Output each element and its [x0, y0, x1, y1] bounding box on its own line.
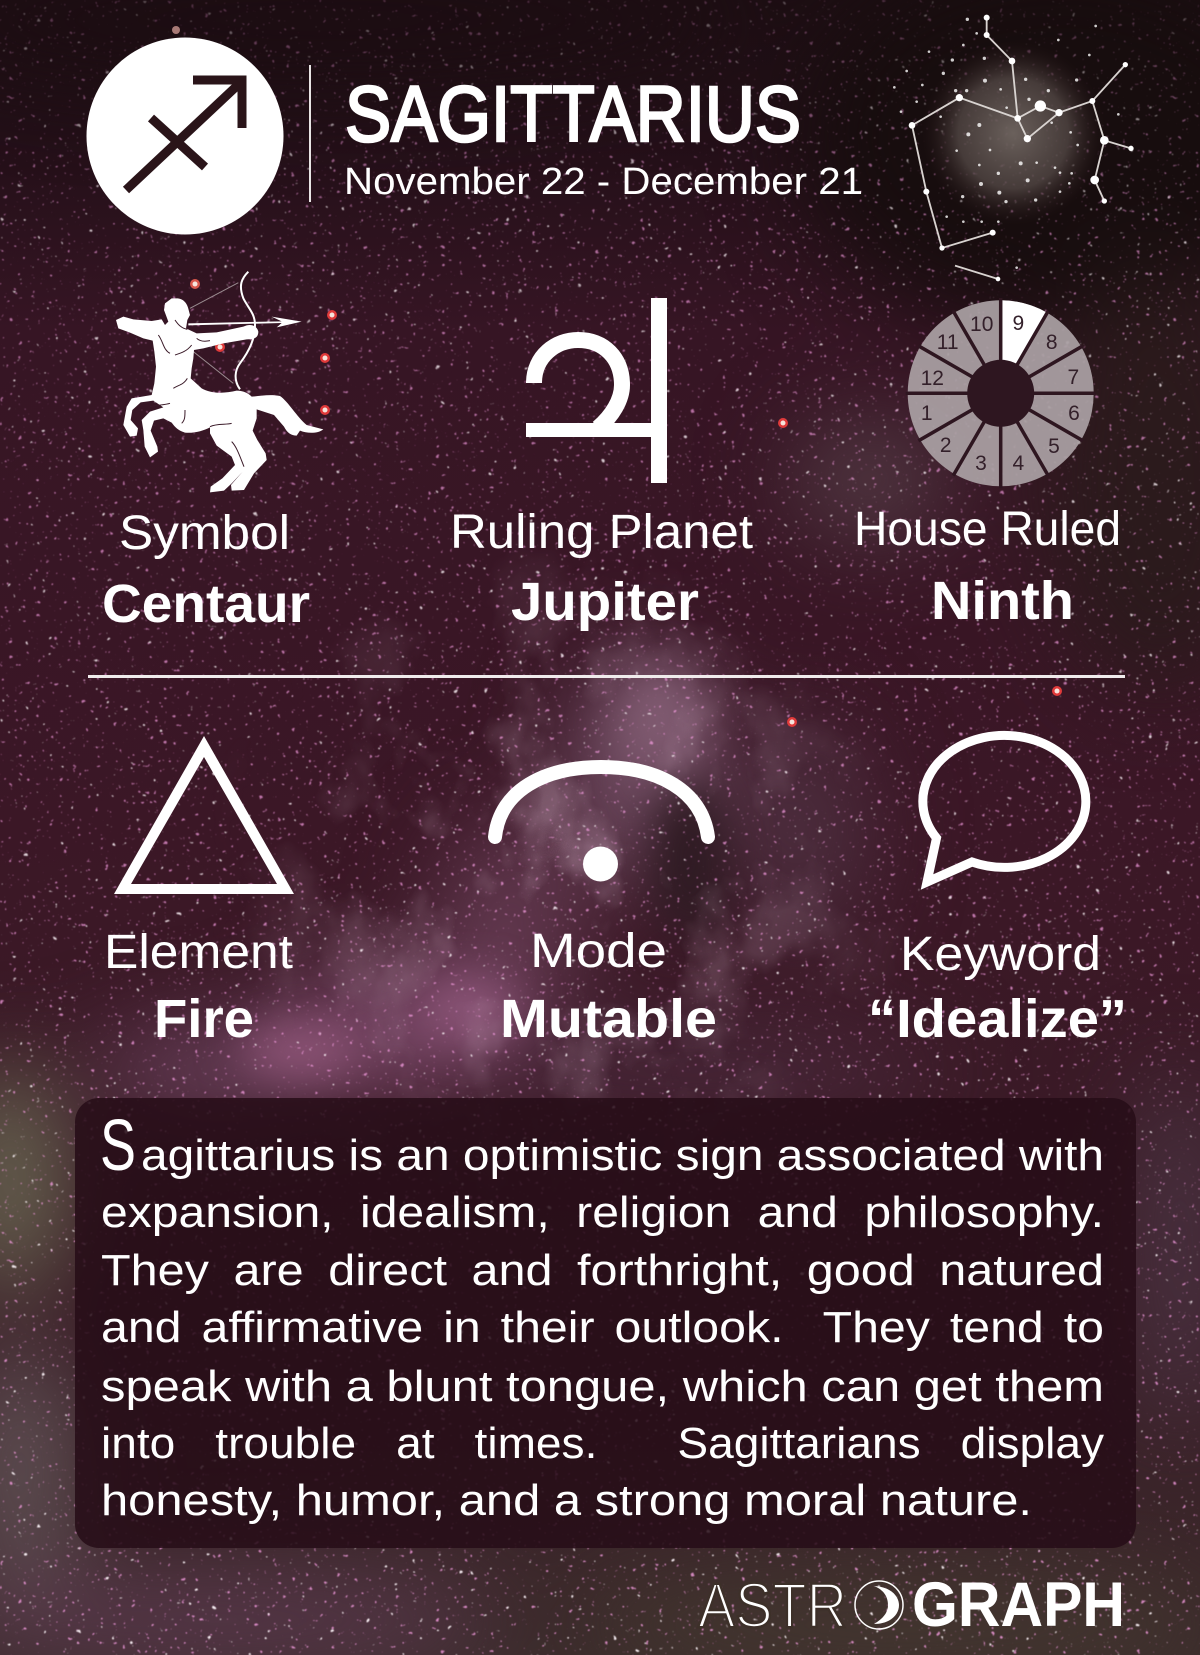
logo: Astrograph [698, 1570, 1125, 1641]
icon: house wheel with ninth house highlighted [906, 298, 1096, 488]
header circle with Sagittarius glyph [86, 38, 284, 234]
label: Symbol Centaur: Symbol [119, 507, 290, 560]
label: Element Fire: Fire [154, 989, 254, 1049]
label: Element Fire [104, 926, 293, 1049]
icon: house wheel with ninth house highlighted: 1 [921, 402, 933, 425]
date range: November 22 - December 21 [344, 161, 863, 203]
label: Ruling Planet Jupiter: Jupiter [511, 572, 699, 632]
title [344, 69, 863, 203]
label: Symbol Centaur [102, 507, 310, 634]
description text: into trouble at times. Sagittarians display [101, 1419, 1104, 1468]
label: Element Fire: Element [104, 926, 293, 979]
icon: speech bubble [923, 735, 1086, 882]
logo: Astrograph: GRAPH [912, 1570, 1125, 1640]
icon: centaur archer [116, 272, 323, 492]
description text: agittarius is an optimistic sign associated with [141, 1131, 1104, 1180]
label: Mode Mutable [500, 925, 717, 1049]
description text: speak with a blunt tongue, which can get them [101, 1362, 1104, 1411]
description text: and affirmative in their outlook. They tend to [101, 1303, 1104, 1352]
logo: Astrograph: ASTR [698, 1571, 847, 1641]
label: House Ruled Ninth [854, 503, 1121, 631]
label: Keyword Idealize: “Idealize” [868, 989, 1127, 1049]
header divider [309, 65, 311, 202]
icon: Jupiter glyph [526, 298, 667, 483]
icon: house wheel with ninth house highlighted: 2 [940, 434, 952, 457]
icon: house wheel with ninth house highlighted: 5 [1048, 435, 1060, 458]
icon: house wheel with ninth house highlighted: 7 [1067, 366, 1079, 389]
label: Keyword Idealize [868, 928, 1127, 1049]
icon: mutable mode arc and dot [495, 767, 708, 882]
description text: They are direct and forthright, good natured [101, 1246, 1104, 1295]
icon: house wheel with ninth house highlighted: 11 [937, 331, 959, 354]
label: House Ruled Ninth: Ninth [931, 571, 1074, 631]
label: House Ruled Ninth: House Ruled [854, 503, 1121, 556]
icon: house wheel with ninth house highlighted: 3 [975, 452, 987, 475]
title: SAGITTARIUS [345, 69, 801, 158]
label: Symbol Centaur: Centaur [102, 574, 310, 634]
icon: house wheel with ninth house highlighted: 10 [970, 313, 993, 336]
label: Ruling Planet Jupiter [450, 506, 753, 632]
label: Keyword Idealize: Keyword [900, 928, 1101, 981]
icon: house wheel with ninth house highlighted: 6 [1068, 402, 1080, 425]
description text [100, 1106, 1104, 1525]
description text: S [100, 1106, 136, 1186]
icon: house wheel with ninth house highlighted: 12 [921, 367, 944, 390]
icon: fire triangle [114, 736, 294, 894]
icon: house wheel with ninth house highlighted: 4 [1012, 452, 1024, 475]
description text: expansion, idealism, religion and philosophy. [101, 1188, 1104, 1237]
label: Mode Mutable: Mutable [500, 989, 717, 1049]
label: Mode Mutable: Mode [530, 925, 667, 978]
section divider [88, 675, 1125, 678]
icon: house wheel with ninth house highlighted: 8 [1046, 331, 1058, 354]
label: Ruling Planet Jupiter: Ruling Planet [450, 506, 753, 559]
panel: description [75, 1098, 1136, 1548]
constellation: Sagittarius [893, 15, 1134, 281]
icon: house wheel with ninth house highlighted: 9 [1012, 312, 1024, 335]
description text: honesty, humor, and a strong moral nature. [101, 1476, 1032, 1525]
